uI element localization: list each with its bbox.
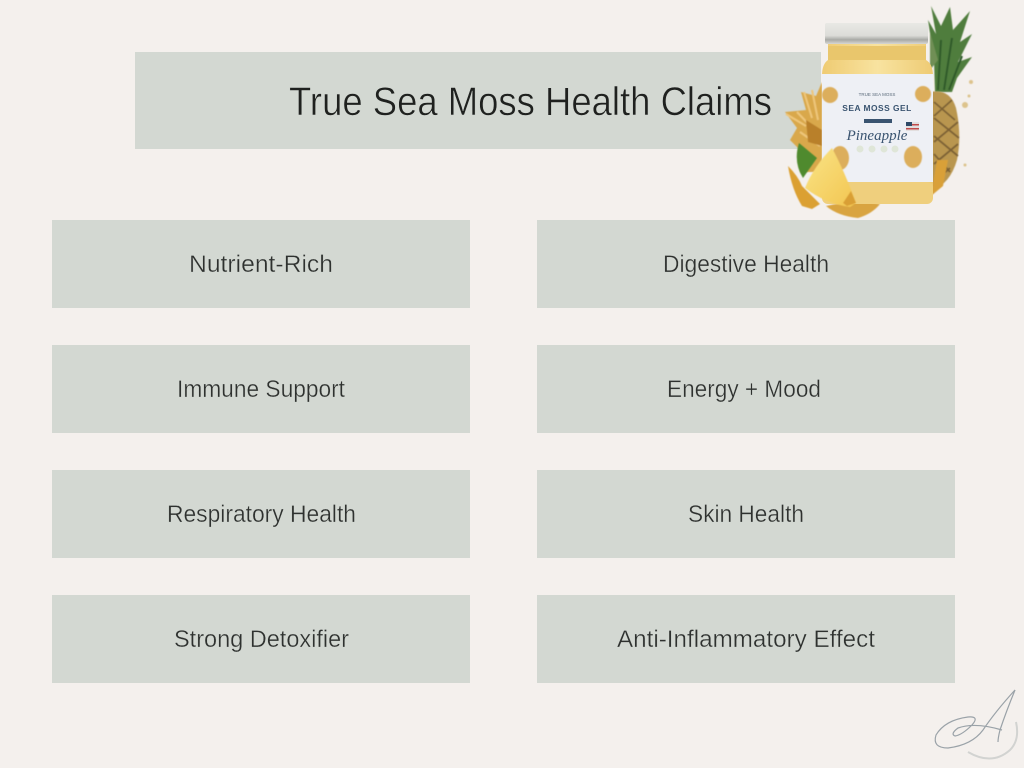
pineapple crown: [928, 6, 972, 92]
panel: Skin Health: Skin Health: [688, 501, 804, 528]
panel: Energy + Mood: Energy + Mood: [667, 376, 821, 403]
panel: Skin Health: [537, 470, 955, 558]
label brand: TRUE SEA MOSS: [859, 92, 895, 97]
jar label: [822, 74, 933, 182]
panel: Strong Detoxifier: [52, 595, 470, 683]
product image: pineapple sea moss gel jar: [785, 6, 973, 218]
label decorations: [822, 86, 931, 170]
splash and sea moss, left: [785, 82, 880, 218]
panel: Strong Detoxifier: Strong Detoxifier: [174, 626, 349, 653]
flag: [906, 122, 919, 131]
panel: Anti-Inflammatory Effect: Anti-Inflammatory Effect: [617, 626, 875, 653]
jar glass: [822, 44, 933, 204]
panel: Digestive Health: [537, 220, 955, 308]
label icons: [856, 146, 898, 152]
panel: Immune Support: [52, 345, 470, 433]
title banner: [135, 52, 821, 149]
splash droplets: [962, 80, 973, 166]
panel: Nutrient-Rich: [52, 220, 470, 308]
jar lid: [825, 23, 928, 44]
panel: Immune Support: Immune Support: [177, 376, 345, 403]
title: True Sea Moss Health Claims: [289, 80, 772, 124]
label flavour: Pineapple: [846, 128, 908, 144]
panel: Nutrient-Rich: Nutrient-Rich: [189, 251, 333, 278]
leaf: [797, 143, 817, 178]
logo: signature A: [935, 690, 1017, 759]
panel: Energy + Mood: [537, 345, 955, 433]
pineapple slice: [805, 148, 856, 207]
pineapple body: [930, 91, 959, 196]
panel: Anti-Inflammatory Effect: [537, 595, 955, 683]
label product name: SEA MOSS GEL: [842, 103, 912, 113]
panel: Digestive Health: Digestive Health: [663, 251, 829, 278]
panel: Respiratory Health: [52, 470, 470, 558]
panel: Respiratory Health: Respiratory Health: [167, 501, 356, 528]
